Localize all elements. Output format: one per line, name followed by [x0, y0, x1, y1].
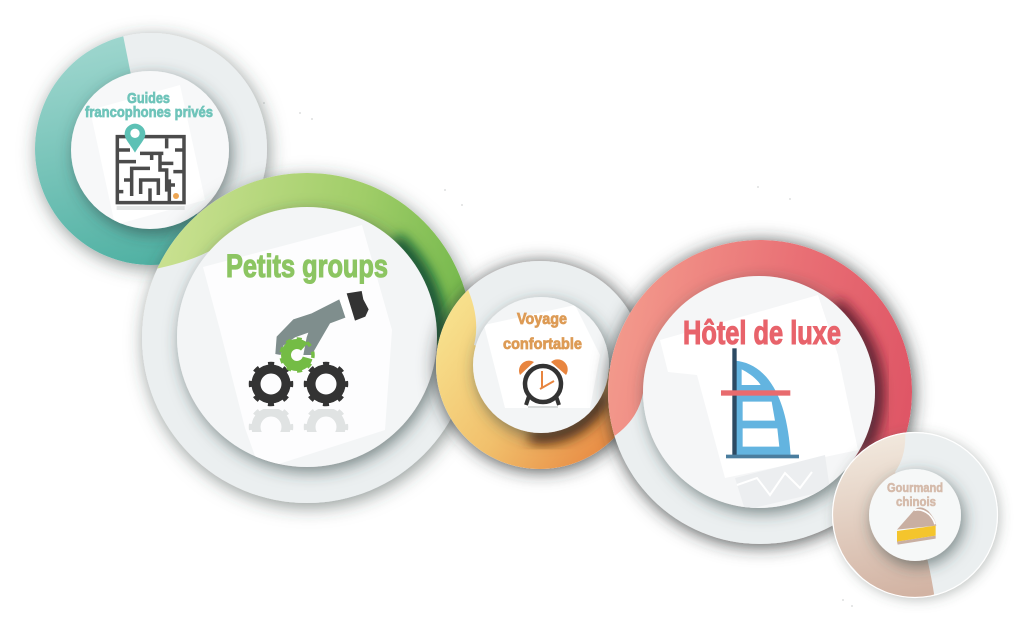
heading: guides: [85, 90, 213, 121]
heading: gourmand chinois: Gourmand: [887, 480, 943, 495]
icon: alarm clock: [519, 359, 568, 408]
heading: voyage confortable: [503, 311, 582, 353]
panel: gourmand chinois: [828, 428, 1006, 606]
heading: voyage confortable: confortable: [503, 336, 582, 353]
background specks: [263, 102, 853, 607]
panel: guides francophones privés: [0, 30, 267, 290]
heading: gourmand chinois: chinois: [896, 494, 936, 509]
heading: hôtel de luxe: Hôtel de luxe: [683, 314, 841, 351]
heading: gourmand chinois: [887, 480, 943, 509]
panel: hôtel de luxe: [594, 227, 928, 561]
panel: voyage confortable: [422, 248, 638, 486]
icon: burj al arab hotel: [721, 348, 799, 458]
icon: maze with pin: [117, 124, 185, 210]
icon: hand and gears: [251, 291, 369, 447]
heading: guides: francophones privés: [85, 104, 213, 121]
heading: petits groups: Petits groups: [226, 248, 388, 284]
panel: petits groups: [131, 164, 476, 520]
heading: guides: Guides: [127, 90, 170, 107]
heading: voyage confortable: Voyage: [517, 311, 567, 328]
icon: cake slice: [897, 507, 936, 545]
